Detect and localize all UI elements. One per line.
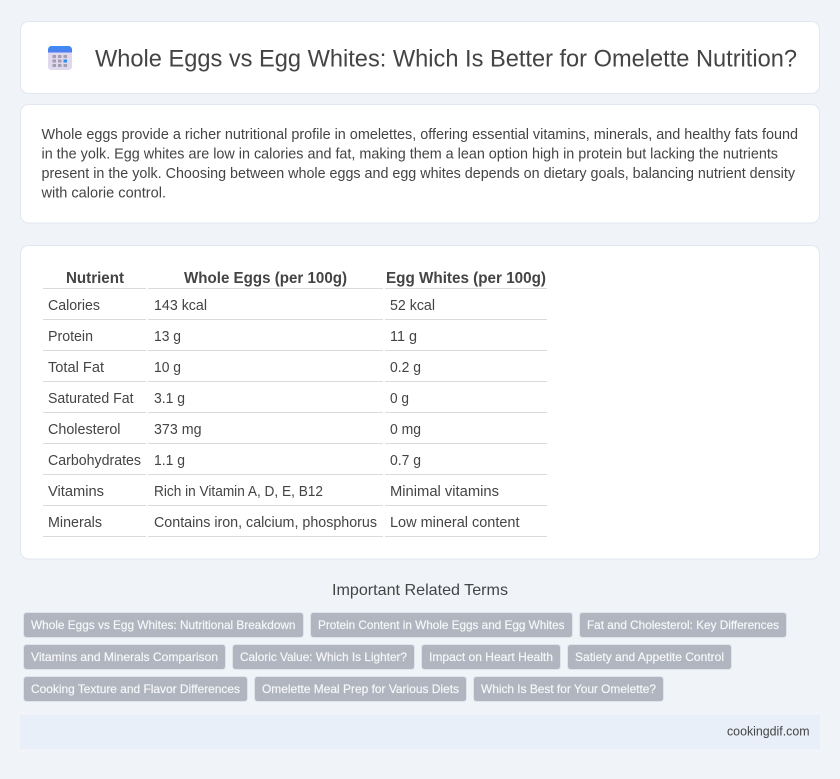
tag — [24, 676, 248, 702]
tag: Impact on Heart Health — [429, 650, 553, 664]
row: calories — [48, 298, 435, 314]
row: cholesterol: 373 mg — [154, 422, 202, 438]
panel: summary paragraph: with calorie control. — [41, 186, 166, 202]
row: vitamins: Vitamins — [48, 484, 104, 500]
row: total fat — [48, 360, 421, 376]
row: carbohydrates — [48, 453, 421, 469]
tag — [474, 676, 664, 702]
footer: cookingdif.com — [727, 724, 810, 738]
panel: summary paragraph: in the yolk. Egg whites are low in calories and fat, making them a lean option high in protein but lacking the nutrients — [42, 146, 778, 162]
row: saturated fat: Saturated Fat — [48, 391, 134, 407]
tag — [422, 644, 560, 670]
tag — [254, 676, 466, 702]
row: calories: 143 kcal — [154, 298, 207, 314]
row: protein: 13 g — [154, 329, 181, 345]
panel: summary paragraph: Whole eggs provide a richer nutritional profile in omelettes, offering essential vitamins, minerals, and healthy fats found — [42, 127, 798, 143]
row: carbohydrates: Carbohydrates — [48, 453, 141, 469]
row: carbohydrates: 1.1 g — [154, 453, 185, 469]
row: calories: Calories — [48, 298, 100, 314]
title: Whole Eggs vs Egg Whites: Which Is Better for Omelette Nutrition? — [95, 46, 797, 72]
tag: Cooking Texture and Flavor Differences — [31, 682, 240, 696]
row: calories: 52 kcal — [390, 298, 435, 314]
table header row — [66, 270, 546, 287]
footer — [20, 715, 820, 749]
tag: Vitamins and Minerals Comparison — [31, 650, 218, 664]
panel: summary paragraph: present in the yolk. Choosing between whole eggs and egg whites depends on dietary goals, balancing nutrient density — [42, 166, 796, 182]
row: cholesterol: Cholesterol — [48, 422, 120, 438]
table header row: Whole Eggs (per 100g) — [184, 270, 347, 287]
row: minerals: Contains iron, calcium, phosphorus — [154, 515, 377, 531]
row: cholesterol — [48, 422, 421, 438]
row: total fat: Total Fat — [48, 360, 104, 376]
row: vitamins: Rich in Vitamin A, D, E, B12 — [154, 484, 323, 500]
panel: nutrition table — [20, 246, 820, 559]
heading: important related terms: Important Related Terms — [332, 582, 508, 599]
tag: Satiety and Appetite Control — [575, 650, 724, 664]
tag — [232, 644, 414, 670]
panel: summary paragraph — [20, 104, 820, 223]
row: cholesterol: 0 mg — [390, 422, 421, 438]
icon: calendar — [48, 46, 72, 70]
row: total fat: 0.2 g — [390, 360, 421, 376]
row: carbohydrates: 0.7 g — [390, 453, 421, 469]
header panel — [20, 22, 820, 94]
row: minerals: Minerals — [48, 515, 102, 531]
row: total fat: 10 g — [154, 360, 181, 376]
tag — [310, 612, 572, 638]
tag: Caloric Value: Which Is Lighter? — [240, 650, 407, 664]
tag: Which Is Best for Your Omelette? — [481, 682, 656, 696]
tag — [580, 612, 786, 638]
table header row: Egg Whites (per 100g) — [386, 270, 546, 287]
tag: Omelette Meal Prep for Various Diets — [262, 682, 459, 696]
tag — [568, 644, 732, 670]
row: saturated fat — [48, 391, 409, 407]
tag: Whole Eggs vs Egg Whites: Nutritional Breakdown — [31, 618, 296, 632]
row: minerals — [48, 515, 520, 531]
row: saturated fat: 3.1 g — [154, 391, 185, 407]
tag: Protein Content in Whole Eggs and Egg Whites — [318, 618, 564, 632]
related term tags — [24, 612, 786, 702]
row: vitamins: Minimal vitamins — [390, 484, 499, 500]
row: minerals: Low mineral content — [390, 515, 520, 531]
tag: Fat and Cholesterol: Key Differences — [587, 618, 779, 632]
row: protein — [48, 329, 417, 345]
row: protein: 11 g — [390, 329, 417, 345]
tag — [24, 612, 304, 638]
tag — [24, 644, 226, 670]
row: vitamins — [48, 484, 499, 500]
row: protein: Protein — [48, 329, 93, 345]
table header row: Nutrient — [66, 270, 124, 287]
row: saturated fat: 0 g — [390, 391, 409, 407]
